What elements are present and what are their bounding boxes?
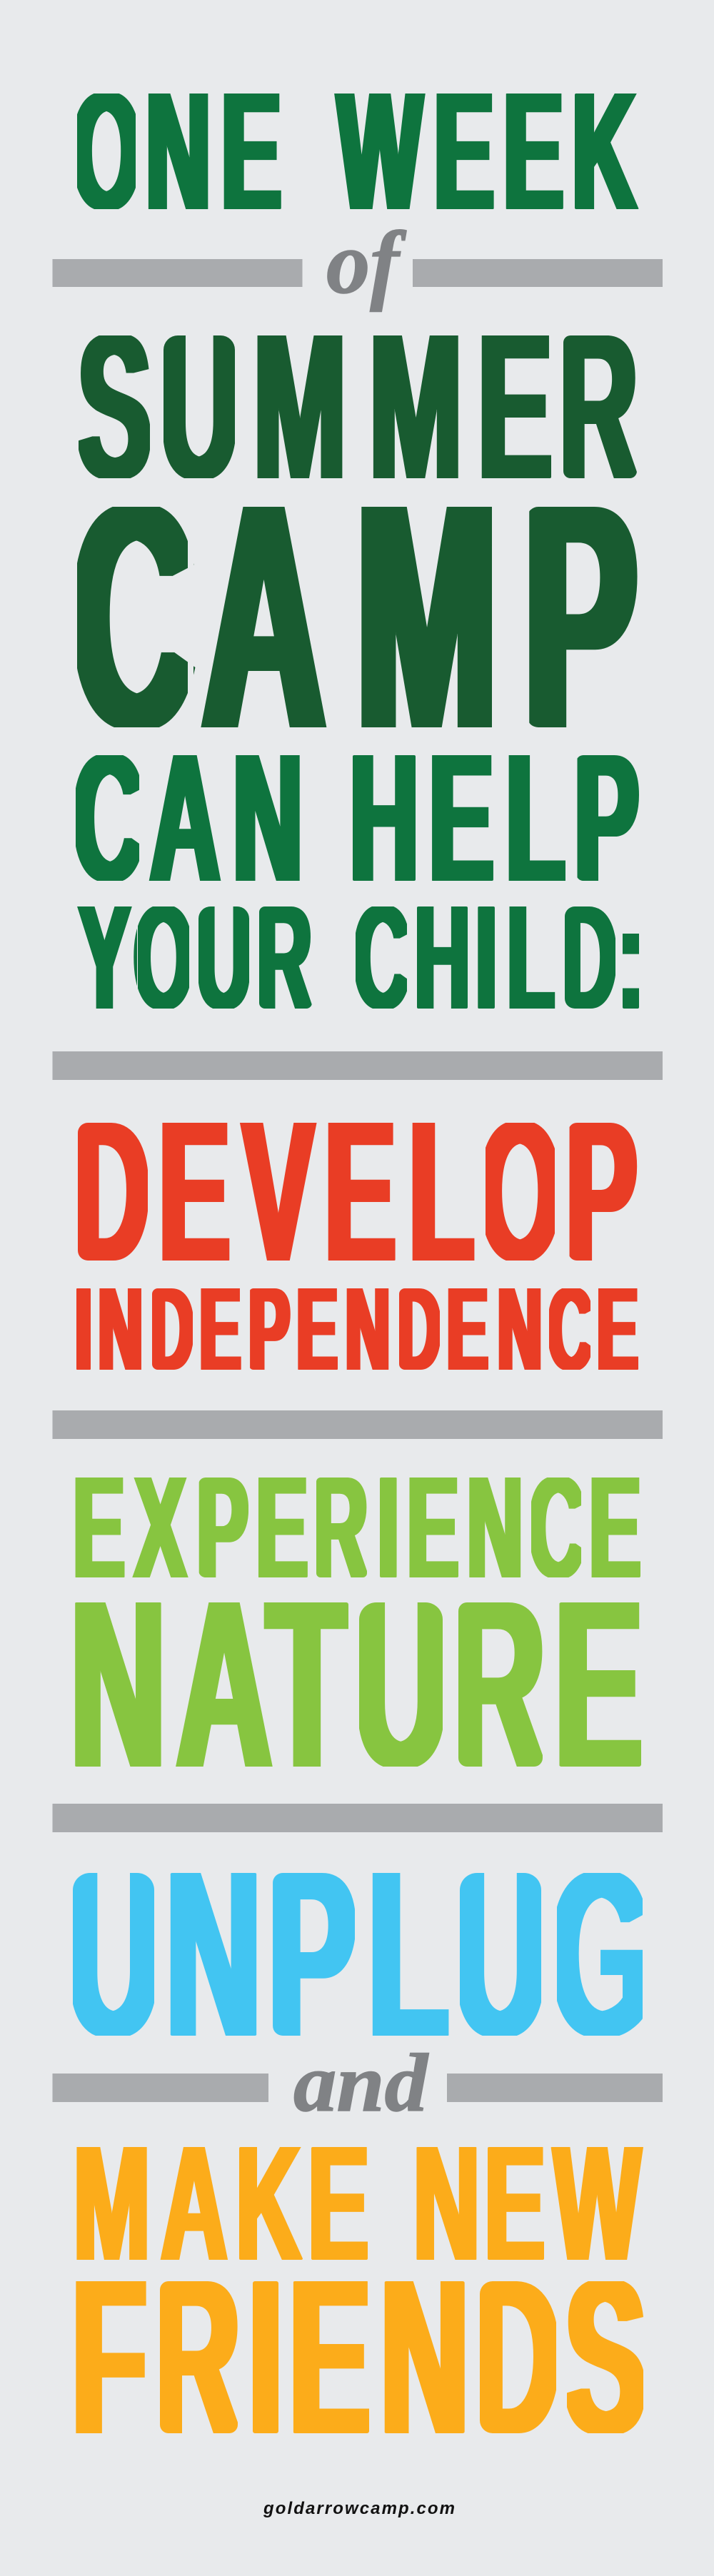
divider bar [53, 1410, 663, 1439]
benefit: develop: DEVELOP [73, 1079, 637, 1303]
benefit: unplug: UNPLUG [66, 1822, 653, 2086]
divider with "and": and [293, 2038, 429, 2128]
benefit: friends: FRIENDS [72, 2233, 646, 2480]
website url: goldarrowcamp.com [263, 2499, 455, 2518]
divider bar [53, 1051, 663, 1080]
divider bar [53, 1804, 663, 1832]
divider with "and" [53, 2038, 663, 2128]
benefit: make new: MAKE NEW [74, 2112, 640, 2295]
heading: your child: YOUR CHILD: [79, 875, 643, 1041]
benefit: experience: EXPERIENCE [73, 1445, 641, 1609]
heading: camp: CAMP [72, 437, 637, 795]
benefit: independence: INDEPENDENCE [75, 1263, 638, 1395]
divider with "of": of [326, 214, 406, 313]
divider with "of" [53, 214, 663, 313]
heading: one week: ONE WEEK [72, 56, 636, 245]
heading: can help: CAN HELP [73, 717, 639, 920]
benefit: nature: NATURE [71, 1552, 643, 1818]
heading: summer: SUMMER [78, 291, 638, 522]
